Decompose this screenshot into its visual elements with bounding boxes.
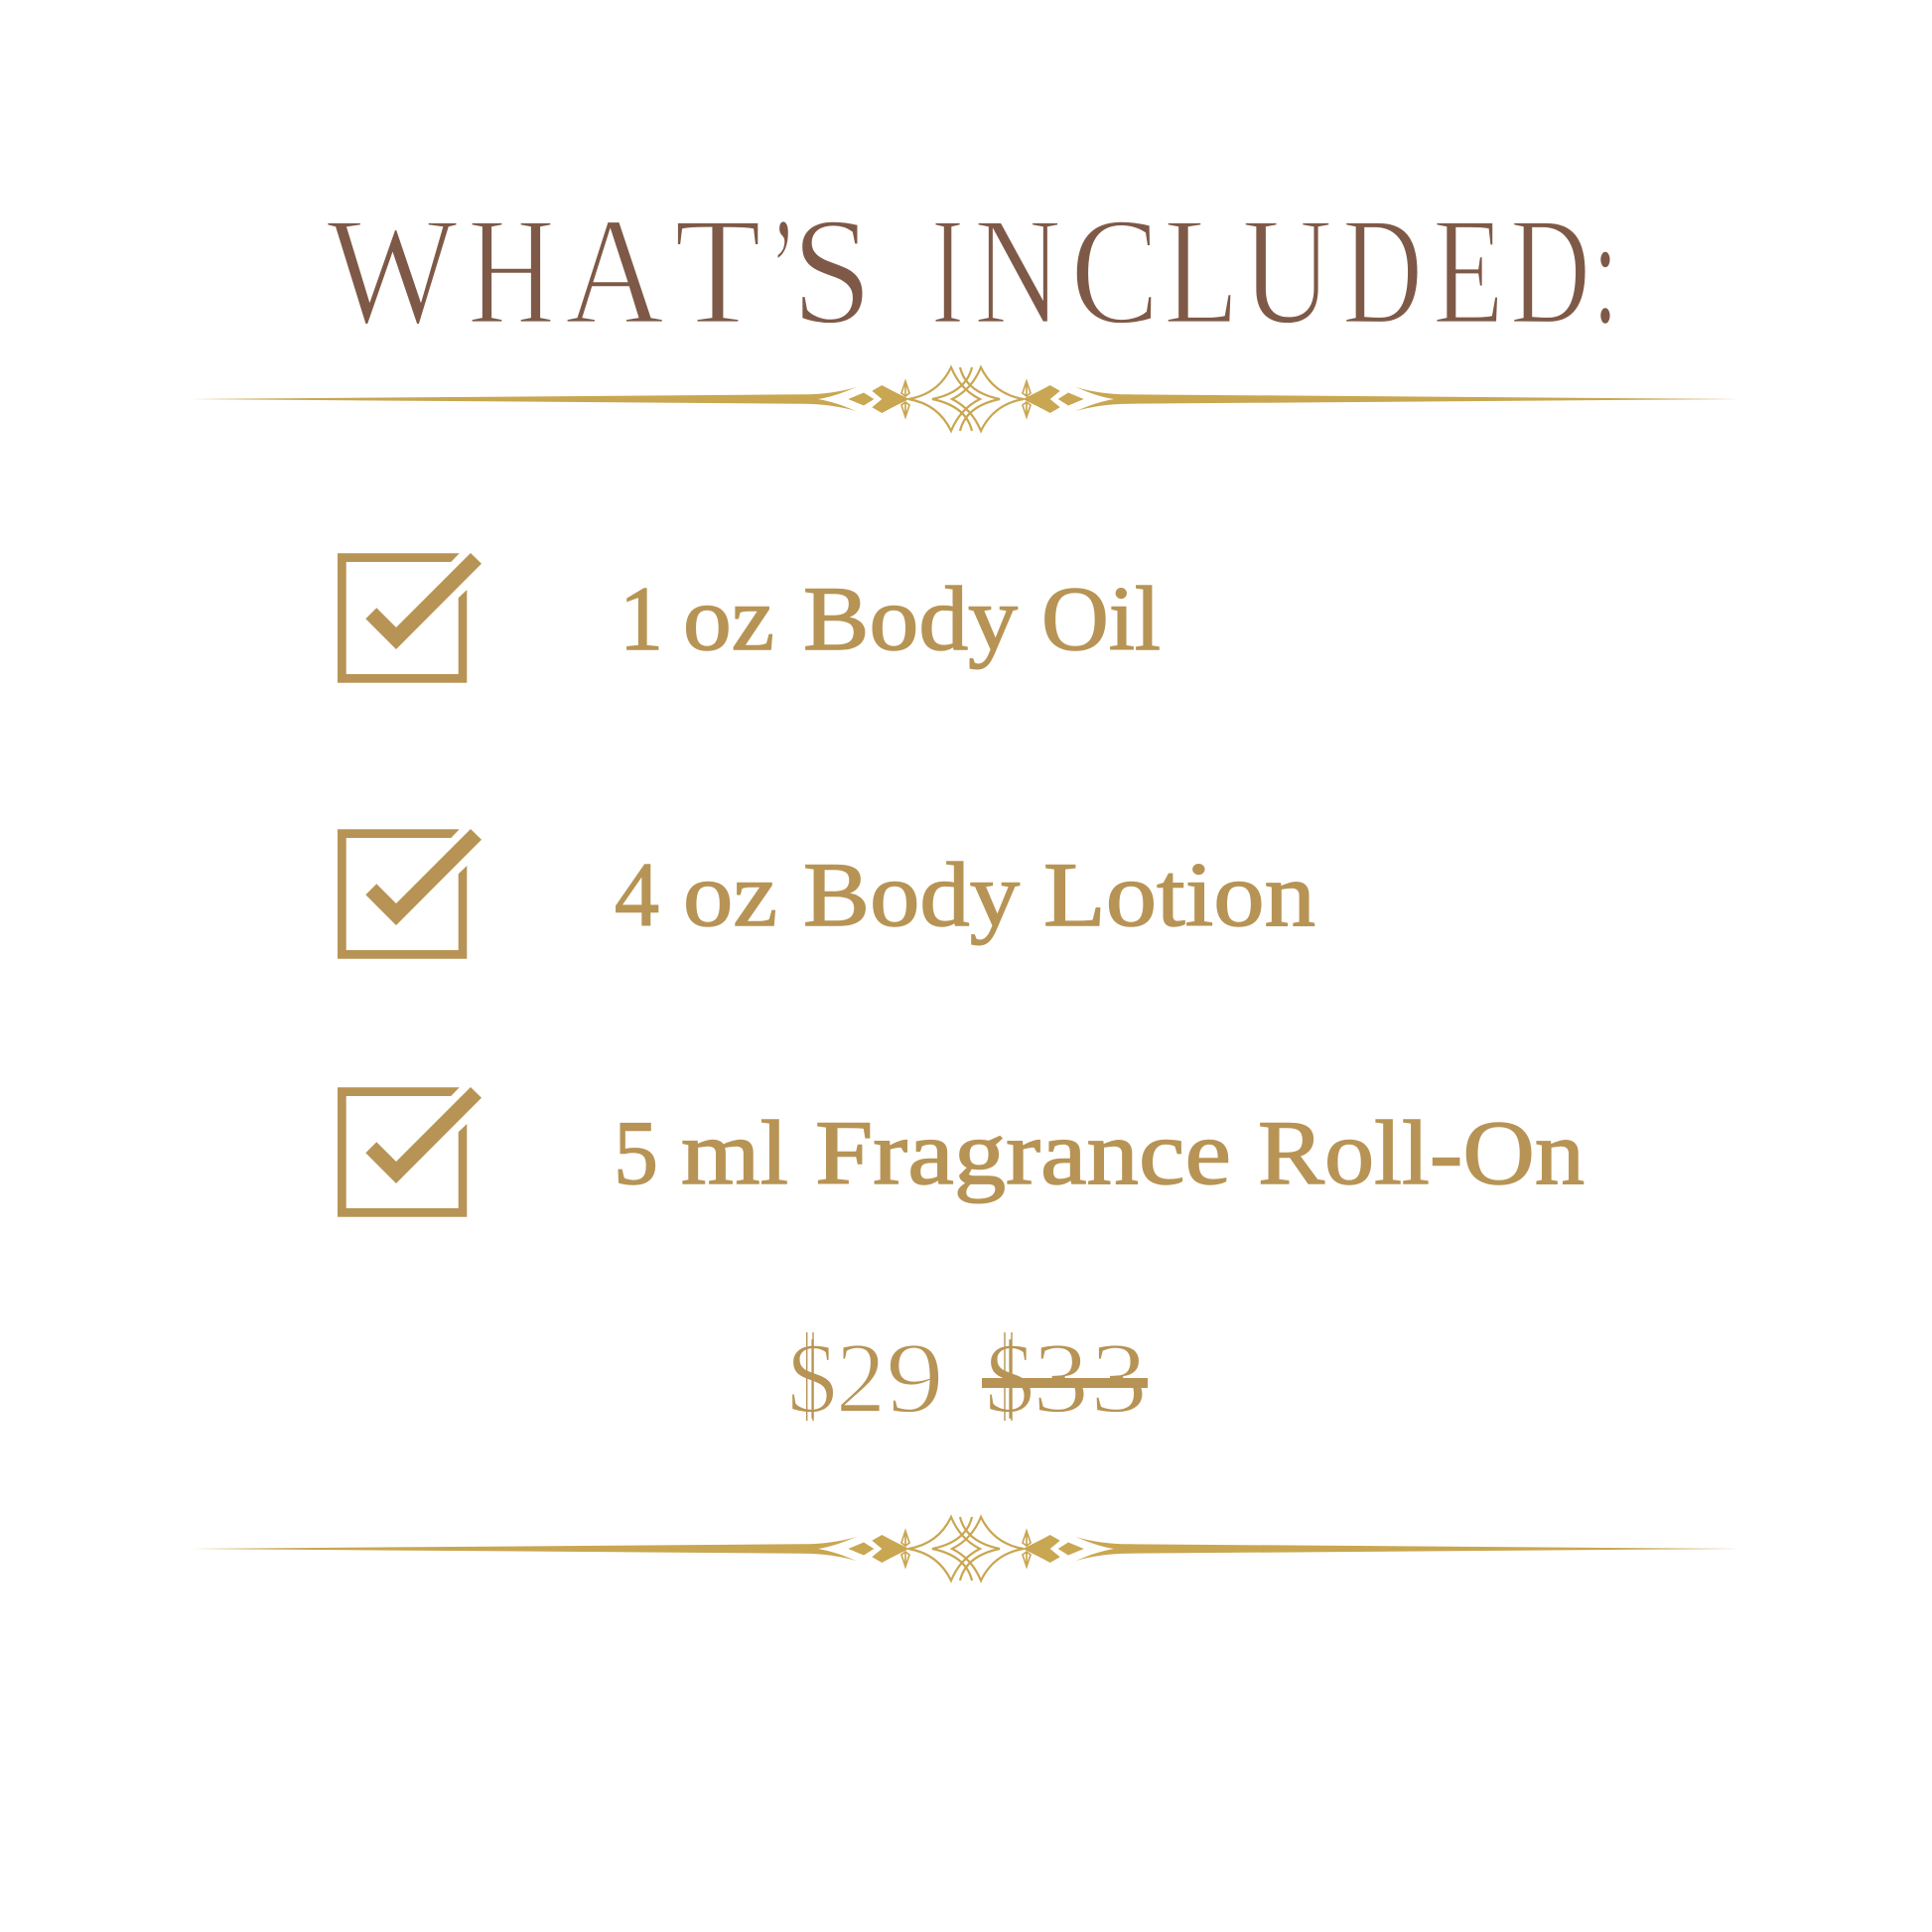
old price: $ — [985, 1322, 1035, 1435]
dollar sign bars — [807, 1332, 1012, 1421]
item label: Roll-On — [1258, 1102, 1585, 1203]
item label: 4 — [615, 844, 659, 945]
checklist item: 4 oz Body Lotion — [338, 829, 1315, 959]
current price: $ — [787, 1322, 837, 1435]
item label: oz — [683, 844, 777, 945]
item label: Fragrance — [815, 1102, 1231, 1203]
strikethrough — [982, 1378, 1148, 1388]
title: D — [1342, 186, 1423, 356]
old price: 3 — [1090, 1322, 1148, 1435]
title: : — [1592, 186, 1618, 356]
item label: Lotion — [1043, 844, 1315, 945]
title: C — [1070, 186, 1160, 356]
title: H — [468, 186, 555, 356]
title: S — [791, 186, 873, 356]
title: E — [1433, 186, 1504, 356]
item label: Body — [803, 844, 1020, 945]
item label: oz — [683, 568, 774, 669]
title: ’ — [770, 186, 796, 356]
title: T — [674, 186, 761, 356]
item label: 1 — [620, 568, 663, 669]
title: D — [1510, 186, 1590, 356]
item label: ml — [681, 1102, 788, 1203]
old price: 3 — [1033, 1322, 1089, 1435]
icon: checkbox — [338, 553, 482, 683]
price block — [787, 1322, 1148, 1435]
title: I — [931, 186, 964, 356]
icon: checkbox — [338, 1087, 482, 1217]
title: N — [974, 186, 1061, 356]
checklist item: 5 ml Fragrance Roll-On — [338, 1087, 1585, 1217]
bottom ornamental divider — [191, 1517, 1741, 1581]
title: A — [565, 186, 664, 356]
item label: Body — [803, 568, 1018, 669]
current price: 9 — [886, 1322, 944, 1435]
checklist item: 1 oz Body Oil — [338, 553, 1161, 683]
icon: checkbox — [338, 829, 482, 959]
item label: Oil — [1041, 568, 1161, 669]
top ornamental divider — [191, 367, 1741, 431]
title: U — [1242, 186, 1332, 356]
item label: 5 — [614, 1102, 658, 1203]
current price: 2 — [836, 1322, 886, 1435]
title: W — [327, 186, 458, 356]
title: L — [1164, 186, 1239, 356]
